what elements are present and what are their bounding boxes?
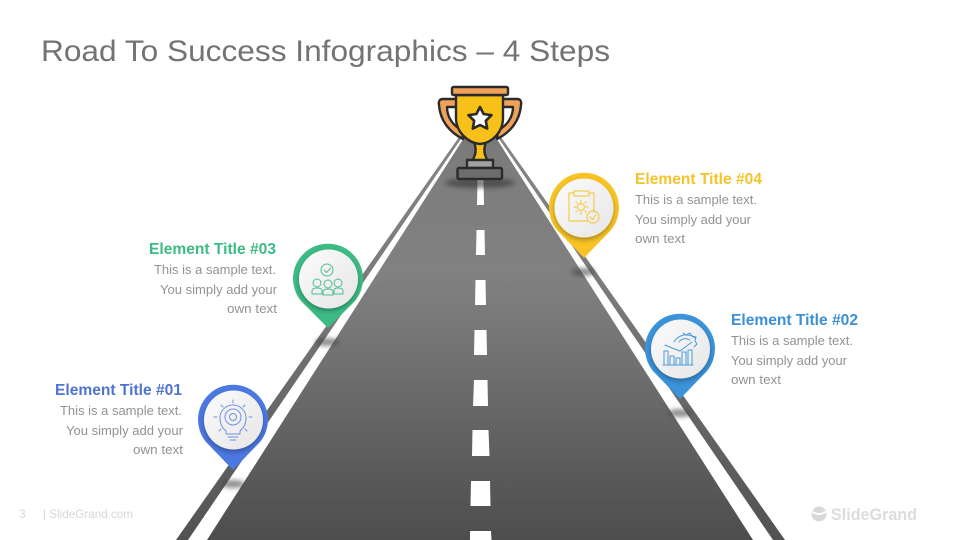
pin shadow [668, 409, 692, 417]
text block: element 02: You simply add your [731, 353, 848, 368]
pin 4 [549, 173, 619, 276]
text block: element 04: You simply add your [635, 212, 752, 227]
text block: element 03: Element Title #03 [149, 241, 276, 258]
pin face [299, 250, 358, 308]
icon: team with check [312, 264, 343, 295]
trophy shadow [445, 178, 515, 188]
text block: element 03 [149, 241, 278, 316]
pin 1 [198, 385, 268, 488]
icon: light bulb with gear [214, 400, 252, 440]
text block: element 01 [55, 382, 184, 457]
text block: element 01: You simply add your [66, 423, 184, 438]
text block: element 04: own text [635, 231, 685, 246]
road [176, 130, 785, 540]
base [467, 160, 493, 168]
left handle [439, 99, 463, 139]
logo [811, 505, 917, 524]
title: Road To Success Infographics – 4 Steps [41, 35, 610, 68]
pin body [549, 173, 619, 258]
pin face [204, 390, 263, 450]
text block: element 02 [731, 312, 858, 387]
text block: element 01: Element Title #01 [55, 382, 182, 399]
icon: trophy [439, 87, 521, 179]
text block: element 02: Element Title #02 [731, 312, 858, 329]
text block: element 01: This is a sample text. [60, 403, 182, 418]
text block: element 03: This is a sample text. [154, 262, 276, 277]
pin shadow [221, 480, 245, 488]
footer site name: | SlideGrand.com [43, 507, 133, 521]
text block: element 04: Element Title #04 [635, 171, 762, 188]
icon: bar chart with gear [663, 333, 697, 365]
text block: element 02: own text [731, 372, 781, 387]
centre dashes [470, 179, 492, 540]
plinth [458, 168, 502, 179]
text block: element 04 [635, 171, 762, 246]
right handle [497, 99, 521, 139]
pin body [645, 314, 715, 399]
text block: element 04: This is a sample text. [635, 192, 757, 207]
right outer stripe [493, 130, 785, 540]
left outer stripe [176, 130, 467, 540]
top rim [452, 87, 508, 95]
logo mark [811, 506, 827, 522]
pin body [198, 385, 268, 470]
star [468, 107, 492, 129]
pin 2 [645, 314, 715, 417]
pin body [293, 244, 363, 328]
footer page number: 3 [19, 507, 26, 521]
stem [472, 142, 488, 161]
text block: element 02: This is a sample text. [731, 333, 853, 348]
pin shadow [315, 338, 339, 346]
logo wordmark: SlideGrand [831, 505, 917, 524]
pin face [554, 178, 614, 238]
text block: element 03: own text [227, 301, 277, 316]
icon: clipboard with gear and check [569, 191, 599, 223]
pin shadow [571, 268, 595, 276]
pin face [651, 320, 710, 378]
text block: element 03: You simply add your [160, 282, 278, 297]
pin 3 [293, 244, 363, 346]
road surface [207, 130, 753, 540]
text block: element 01: own text [133, 442, 183, 457]
cup [456, 95, 503, 144]
